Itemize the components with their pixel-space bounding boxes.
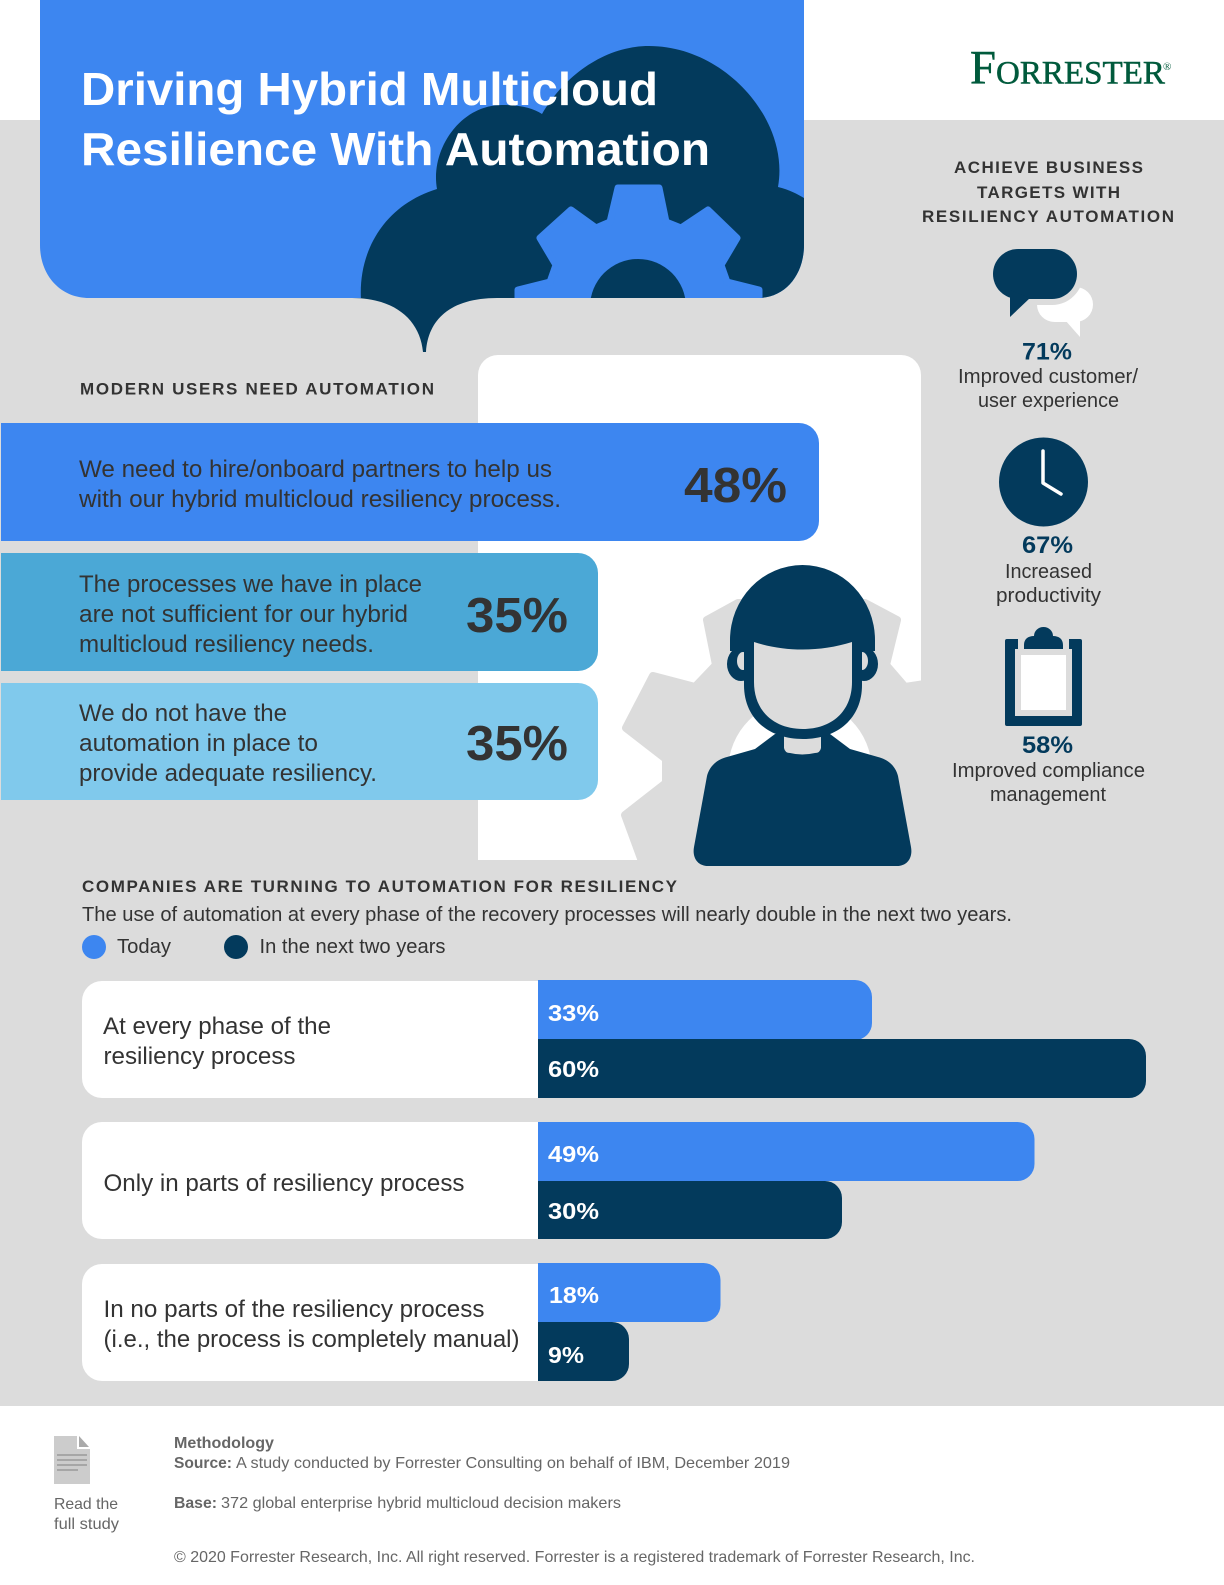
chart row: every phase: resiliency process bbox=[104, 1043, 296, 1070]
stat: 58 percent: Improved compliance bbox=[952, 760, 1145, 782]
bar: 48 percent: We need to hire/onboard partners to help us bbox=[79, 456, 552, 483]
stat: 71 percent: Improved customer/ bbox=[958, 366, 1138, 388]
chart row: only in parts: 30% bbox=[548, 1198, 599, 1224]
chart row: every phase bbox=[82, 980, 1146, 1098]
stat: 58 percent: 58% bbox=[1022, 732, 1073, 759]
methodology text: A study conducted by Forrester Consulting on behalf of IBM, December 2019 bbox=[236, 1455, 790, 1472]
read the full study bbox=[54, 1496, 119, 1533]
stat: 71 percent bbox=[958, 338, 1138, 412]
methodology text: Base: bbox=[174, 1495, 217, 1512]
stat: 67 percent bbox=[996, 532, 1101, 607]
chart row: no parts: In no parts of the resiliency process bbox=[104, 1296, 484, 1323]
methodology text: Methodology bbox=[174, 1435, 274, 1452]
legend: In the next two years bbox=[260, 935, 446, 958]
chart row: no parts: (i.e., the process is completely manual) bbox=[104, 1326, 520, 1353]
Forrester logo bbox=[970, 42, 1171, 94]
bar: 48 percent: 48% bbox=[684, 459, 787, 513]
stat: 71 percent: 71% bbox=[1022, 338, 1072, 366]
chart row: every phase: At every phase of the bbox=[103, 1013, 331, 1040]
panel: white backdrop with gear bbox=[478, 355, 925, 864]
bar: 35 percent automation: automation in place to bbox=[79, 730, 318, 757]
bar: 48 percent: with our hybrid multicloud resiliency process. bbox=[78, 486, 561, 513]
bar: 35 percent automation: We do not have the bbox=[79, 700, 287, 727]
bar: 35 percent automation: 35% bbox=[466, 717, 568, 771]
Forrester logo: ORRESTER bbox=[996, 56, 1165, 92]
subheading: The use of automation at every phase of the recovery processes will nearly double in the next two years. bbox=[82, 903, 1012, 926]
copyright: © 2020 Forrester Research, Inc. All right reserved. Forrester is a registered trademark of Forrester Research, Inc. bbox=[174, 1549, 975, 1566]
stat: 67 percent: productivity bbox=[996, 585, 1101, 607]
bar: 48 percent bbox=[1, 423, 819, 541]
stat: 67 percent: 67% bbox=[1022, 532, 1073, 559]
bar: 35 percent processes: multicloud resiliency needs. bbox=[79, 631, 374, 658]
legend: Today bbox=[117, 935, 172, 958]
stat: 67 percent: Increased bbox=[1005, 561, 1092, 583]
chart row: no parts: 9% bbox=[548, 1342, 584, 1368]
icon: document bbox=[54, 1436, 90, 1484]
methodology text bbox=[174, 1435, 790, 1512]
methodology text: Source: bbox=[174, 1455, 232, 1472]
bar: 35 percent automation bbox=[1, 683, 598, 800]
read the full study: full study bbox=[54, 1516, 119, 1533]
stat: 58 percent bbox=[952, 732, 1145, 806]
heading: achieve business targets bbox=[922, 158, 1174, 226]
heading: companies turning to automation: COMPANIES ARE TURNING TO AUTOMATION FOR RESILIENCY bbox=[82, 877, 678, 896]
heading: achieve business targets: ACHIEVE BUSINESS bbox=[954, 158, 1143, 177]
bar: 35 percent processes bbox=[1, 553, 598, 671]
chart row: only in parts: Only in parts of resiliency process bbox=[104, 1170, 464, 1197]
heading: modern users: MODERN USERS NEED AUTOMATION bbox=[80, 380, 434, 398]
chart row: every phase: 33% bbox=[548, 1000, 599, 1026]
chart row: no parts: 18% bbox=[549, 1282, 599, 1308]
header banner with cloud and gear bbox=[40, 0, 804, 355]
chart row: only in parts: 49% bbox=[548, 1141, 599, 1167]
icon: clock bbox=[999, 438, 1088, 526]
bar: 35 percent processes: are not sufficient for our hybrid bbox=[79, 601, 408, 628]
stat: 58 percent: management bbox=[990, 784, 1106, 806]
icon: person bbox=[694, 565, 911, 866]
methodology text: 372 global enterprise hybrid multicloud decision makers bbox=[221, 1495, 621, 1512]
Forrester logo: F bbox=[970, 42, 996, 94]
heading: achieve business targets: TARGETS WITH bbox=[977, 183, 1120, 202]
icon: speech bubbles bbox=[993, 249, 1093, 337]
read the full study: Read the bbox=[54, 1496, 118, 1513]
bar: 35 percent processes: 35% bbox=[466, 589, 568, 643]
chart row: no parts bbox=[82, 1263, 720, 1381]
icon: clipboard bbox=[1005, 627, 1082, 726]
chart row: only in parts bbox=[82, 1122, 1034, 1239]
stat: 71 percent: user experience bbox=[978, 390, 1119, 412]
chart row: every phase: 60% bbox=[548, 1056, 599, 1082]
title: Driving Hybrid Multicloud bbox=[81, 63, 658, 115]
bar: 35 percent automation: provide adequate resiliency. bbox=[79, 760, 377, 787]
heading: achieve business targets: RESILIENCY AUTOMATION bbox=[922, 207, 1174, 226]
title bbox=[81, 63, 710, 175]
legend bbox=[82, 935, 446, 959]
Forrester logo: ® bbox=[1163, 61, 1171, 73]
title: Resilience With Automation bbox=[81, 123, 710, 175]
bar: 35 percent processes: The processes we have in place bbox=[79, 571, 422, 598]
